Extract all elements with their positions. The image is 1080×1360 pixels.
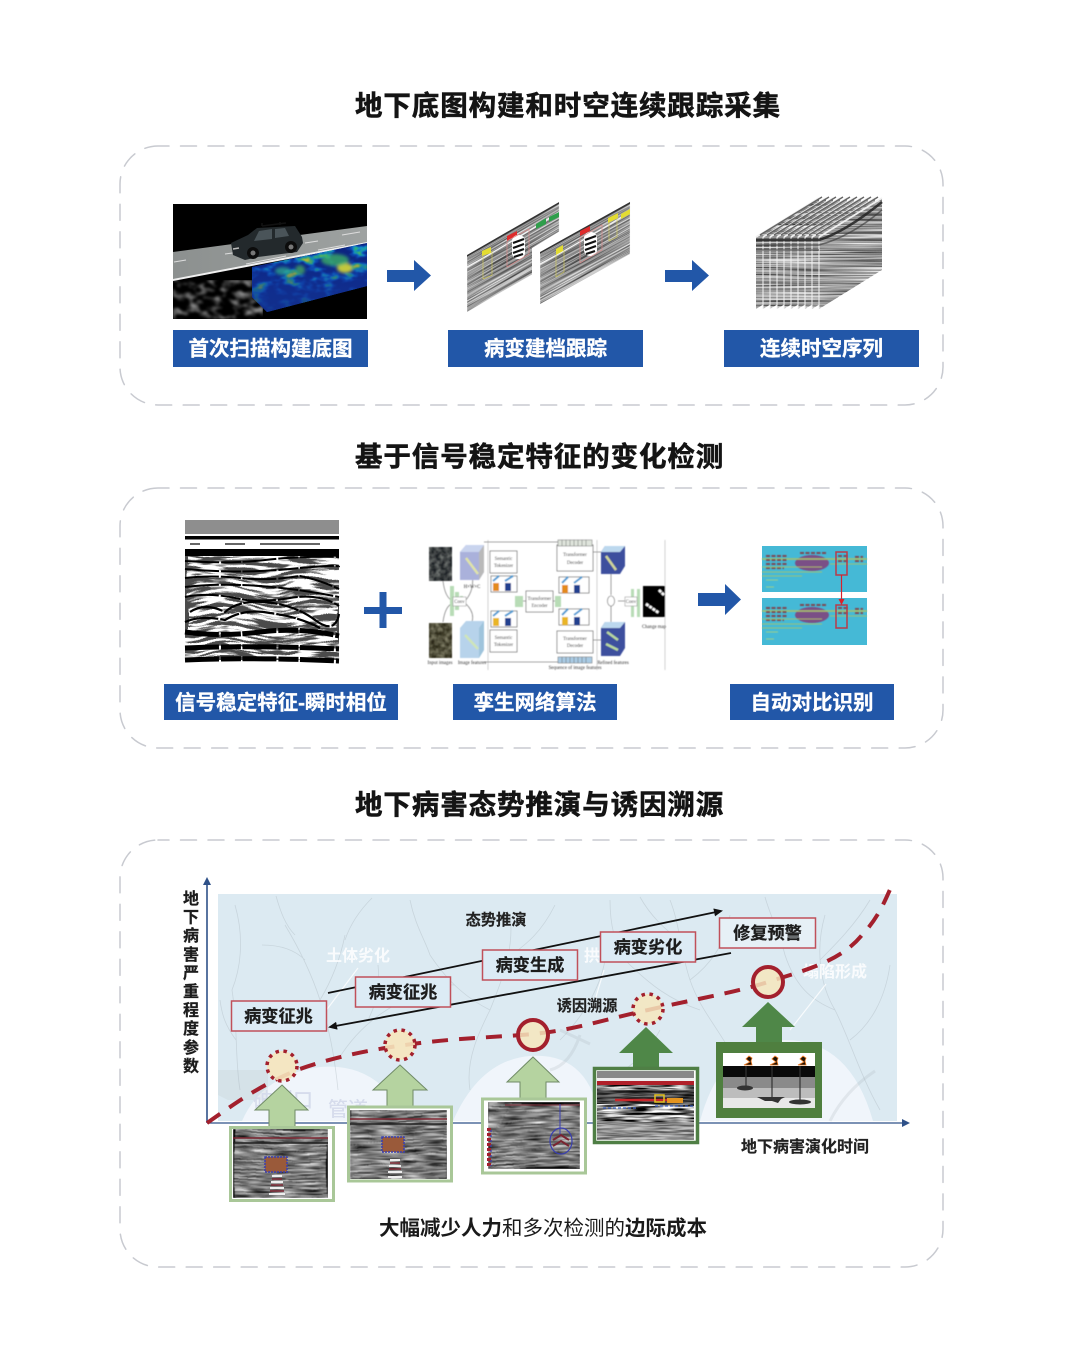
- label: 孪生网络算法: [453, 684, 617, 720]
- marker 2: [385, 1030, 415, 1060]
- label: 连续时空序列: [724, 330, 919, 367]
- section A: [467, 202, 559, 312]
- diagram: siamese network: Tokenizer: [494, 643, 513, 648]
- diagram: siamese network: Semantic: [495, 557, 512, 562]
- image feature cubes: [458, 545, 486, 666]
- diagram: siamese network: Tokenizer: [494, 564, 513, 569]
- faded background labels: 土体劣化: [326, 946, 390, 965]
- image: automatic comparison: [762, 546, 867, 645]
- image: first scan vehicle and underground map: [173, 204, 367, 319]
- title: section 2: 基于信号稳定特征的变化检测: [355, 441, 724, 472]
- faded background labels: 管道: [328, 1098, 368, 1121]
- x axis label: 地下病害演化时间: [741, 1137, 869, 1156]
- title: section 3: 地下病害态势推演与诱因溯源: [355, 789, 724, 820]
- change map: [642, 586, 667, 630]
- panel: section 1 dashed frame: [120, 146, 943, 405]
- title: section 1: 地下底图构建和时空连续跟踪采集: [355, 90, 781, 121]
- image: instantaneous phase radargram: [185, 520, 339, 666]
- diagram: siamese network: Encoder: [532, 604, 548, 609]
- label box: 病变征兆 1: [232, 1001, 326, 1031]
- label: 病变建档跟踪: [448, 330, 643, 367]
- label box: 病变生成: [482, 950, 578, 980]
- diagram: siamese network: Transformer: [563, 553, 587, 558]
- stage 4: arrow and radargram: [594, 1027, 698, 1142]
- label: 连续时空序列: 连续时空序列: [760, 336, 883, 360]
- label: 信号稳定特征-瞬时相位: 信号稳定特征-瞬时相位: [175, 690, 387, 714]
- panel: section 3 dashed frame: [120, 840, 943, 1267]
- stage 2: arrow and radargram: [348, 1065, 452, 1181]
- arrow 2: [665, 260, 709, 291]
- token sequences: Sequence of image features: [549, 666, 602, 671]
- marker 5: [753, 967, 783, 997]
- curve: severity evolution: [207, 885, 892, 1123]
- marker 3: [518, 1020, 548, 1050]
- diagram: siamese network: Conv: [454, 600, 465, 605]
- marker 4: [633, 994, 663, 1024]
- icon: plus: [364, 592, 402, 628]
- label box: 修复预警: [720, 918, 816, 948]
- arrow 1: [387, 260, 431, 291]
- label: 信号稳定特征-瞬时相位: [164, 684, 398, 720]
- input images: Input images: [428, 661, 453, 666]
- change map: Change map: [642, 625, 667, 630]
- label: 首次扫描构建底图: [173, 330, 368, 367]
- y axis label: 严: [183, 965, 199, 982]
- faded background labels: [253, 946, 867, 1121]
- stage 5: arrow and collapse diagram: [716, 1002, 822, 1118]
- tokens: [493, 576, 582, 626]
- y axis label: 下: [183, 910, 199, 927]
- faded background labels: 塌陷形成: [803, 962, 867, 981]
- marker 1: [267, 1051, 297, 1081]
- image feature cubes: Image features: [458, 661, 486, 666]
- label: 首次扫描构建底图: 首次扫描构建底图: [188, 336, 352, 360]
- stage 1: arrow and radargram: [230, 1085, 334, 1200]
- flags and targets: [482, 209, 630, 279]
- y axis label: 病: [183, 926, 199, 945]
- panel: section 2 dashed frame: [120, 488, 943, 748]
- label box: 病变劣化: 病变劣化: [614, 937, 682, 957]
- token sequences: [549, 540, 602, 671]
- label box: 病变劣化: [600, 932, 696, 962]
- label box: 病变征兆 2: [356, 977, 450, 1007]
- conv block and difference: [608, 589, 640, 617]
- y axis label: 参: [183, 1038, 199, 1057]
- y axis label: 重: [183, 983, 199, 1001]
- label: 孪生网络算法: 孪生网络算法: [474, 690, 596, 714]
- arrow 3: [698, 584, 741, 615]
- label box: 病变征兆 2: 病变征兆: [369, 982, 437, 1002]
- image feature cubes: H×W×C: [464, 585, 480, 590]
- section B: [540, 202, 630, 304]
- faded background labels: 破裂口: [253, 1089, 313, 1112]
- label: 诱因溯源: 诱因溯源: [557, 998, 617, 1015]
- diagram: siamese network: Decoder: [567, 561, 584, 566]
- bottom caption: 大幅减少人力和多次检测的边际成本: [379, 1216, 707, 1240]
- diagram: siamese network: Decoder: [567, 644, 584, 649]
- diagram: siamese network: [428, 540, 667, 671]
- y axis label: 地: [183, 891, 199, 908]
- y axis label: 程: [183, 1002, 199, 1020]
- label: 态势推演: 态势推演: [466, 911, 526, 929]
- y axis label: 害: [183, 945, 199, 964]
- input images: [428, 547, 453, 666]
- axes: [203, 877, 910, 1127]
- image: lesion archive tracking sections: [467, 202, 630, 312]
- stage 3: arrow and radargram: [482, 1057, 586, 1173]
- diagram: siamese network: Transformer: [528, 597, 552, 602]
- faded background labels: 拱: [584, 947, 600, 965]
- label: 自动对比识别: [730, 684, 894, 720]
- refined feature cubes: [597, 546, 629, 666]
- semantic tokenizers: [490, 545, 593, 653]
- diagram: siamese network: Transformer: [563, 637, 587, 642]
- diagram: siamese network: Semantic: [495, 636, 512, 641]
- y axis label: 度: [183, 1019, 199, 1038]
- label: 病变建档跟踪: 病变建档跟踪: [484, 336, 607, 360]
- conv block and difference: Conv: [626, 600, 637, 605]
- label box: 病变征兆 1: 病变征兆: [244, 1006, 313, 1026]
- refined feature cubes: Refined features: [597, 661, 629, 666]
- state arrows: [328, 911, 731, 1027]
- image: continuous spatio-temporal sequence: [756, 197, 882, 309]
- conv bars: [450, 586, 463, 616]
- label box: 病变生成: 病变生成: [496, 955, 564, 975]
- chart background with mounds and trees: [218, 894, 897, 1121]
- icon: car: [231, 222, 303, 260]
- label box: 修复预警: 修复预警: [733, 923, 802, 943]
- y axis label: 数: [183, 1057, 199, 1075]
- label: 自动对比识别: 自动对比识别: [750, 692, 874, 714]
